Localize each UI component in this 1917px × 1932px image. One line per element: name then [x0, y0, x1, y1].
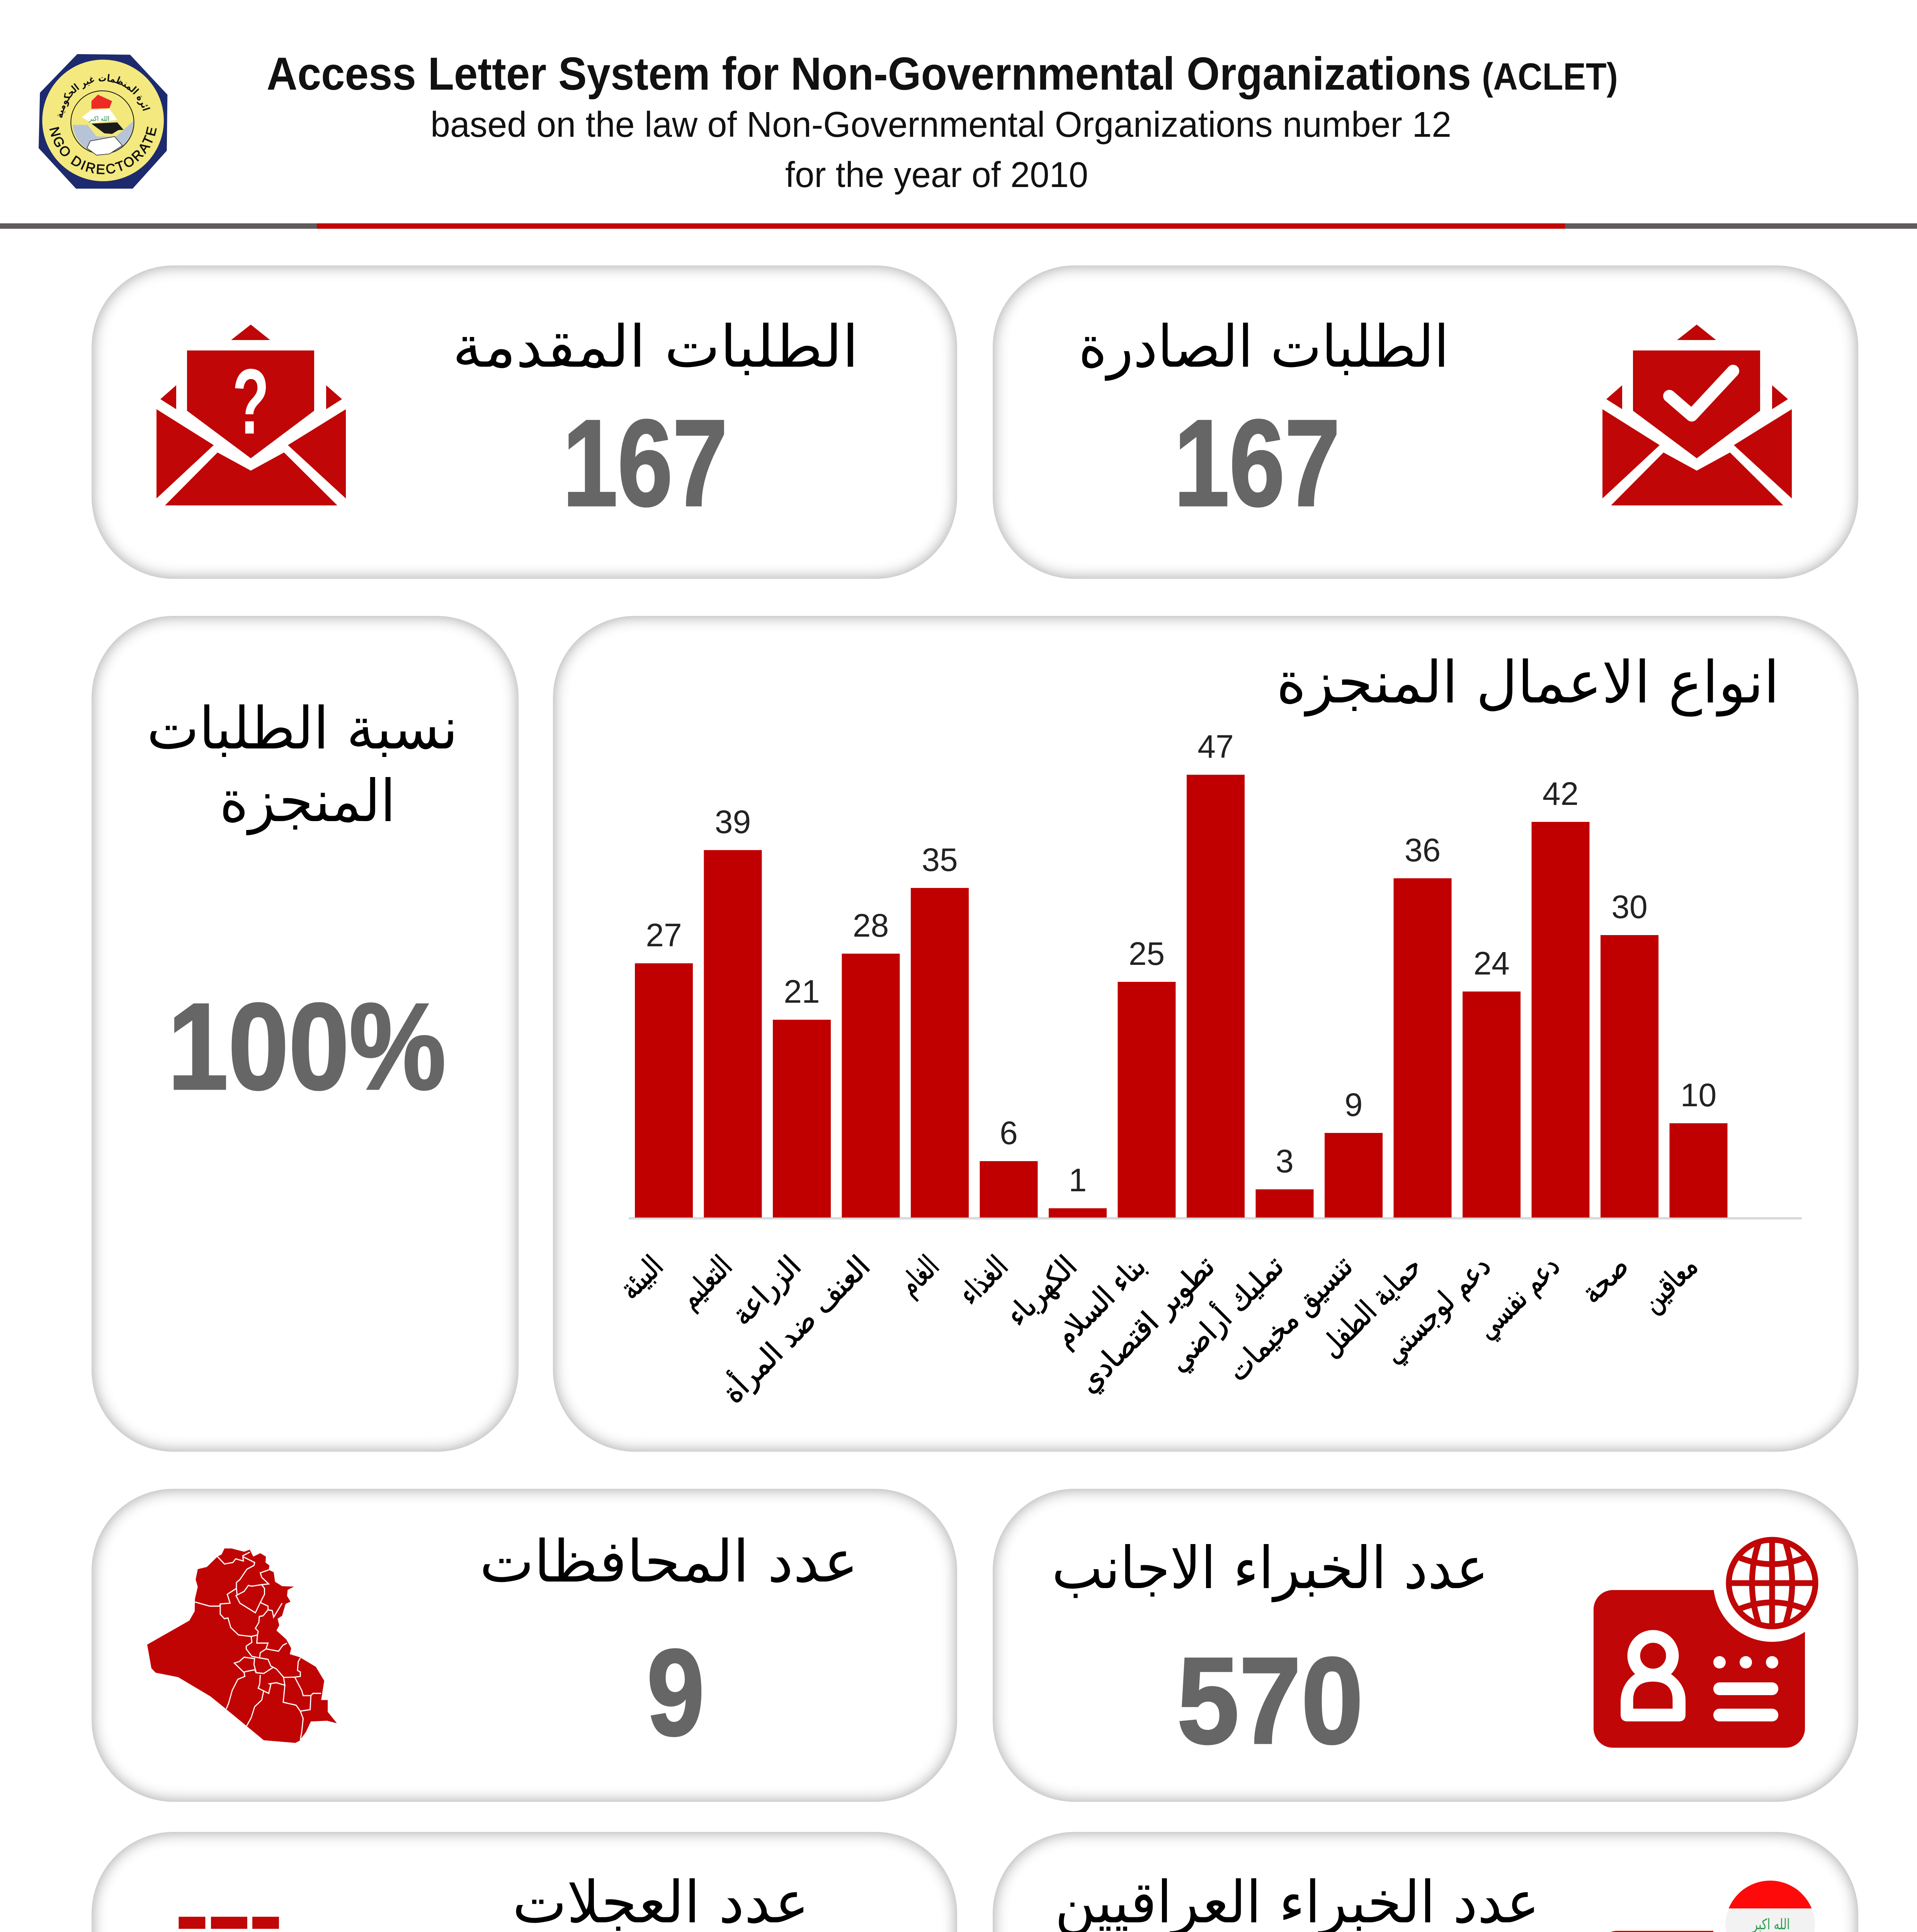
heading: عدد المحافظات [480, 1528, 858, 1595]
logo: NGO Directorate seal: NGO DIRECTORATE [46, 125, 160, 177]
bar chart: الكهرباء [1000, 1249, 1084, 1333]
panel: types of completed work [553, 616, 1859, 1452]
bar chart: 39 [715, 804, 751, 840]
panel: requests submitted [92, 265, 957, 579]
panel: Iraqi experts [993, 1832, 1858, 1932]
icon: map of Iraq [147, 1548, 337, 1743]
heading: انواع الاعمال المنجزة [1276, 649, 1779, 717]
bar chart: الزراعة [725, 1249, 808, 1332]
logo: NGO Directorate seal: الله اكبر [88, 115, 109, 122]
panel: governorates [92, 1489, 957, 1802]
bar chart: تمليك أراضي [1160, 1247, 1291, 1379]
bar chart: بناء السلام [1047, 1249, 1152, 1354]
bar chart: تطوير اقتصادي [1071, 1249, 1221, 1400]
bar chart: حماية الطفل [1313, 1249, 1428, 1364]
bar chart: الغذاء [952, 1249, 1014, 1311]
bar chart: 42 [1543, 776, 1579, 812]
value: 167 [1174, 395, 1340, 532]
bar chart: 25 [1129, 935, 1165, 972]
bar chart: البيئة [612, 1249, 670, 1306]
logo: NGO Directorate seal: دائرة المنظمات غير الحكومية [17, 26, 152, 119]
title block: based on the law of Non-Governmental Organizations number 12 [430, 104, 1451, 145]
bar chart: تنسيق مخيمات [1220, 1249, 1359, 1388]
icon: ID card with globe [1594, 1524, 1831, 1748]
bar chart: 6 [1000, 1115, 1018, 1151]
bar chart: 9 [1345, 1087, 1362, 1123]
icon: ID card with Iraqi flag [1611, 1881, 1815, 1932]
bar chart: التعليم [672, 1249, 738, 1315]
bar chart: 1 [1069, 1162, 1087, 1198]
bar chart: العنف ضد المرأة [714, 1247, 877, 1410]
title block [267, 48, 1618, 195]
bar chart: 10 [1681, 1077, 1716, 1113]
bar chart: معاقين [1634, 1249, 1704, 1319]
bar chart: 24 [1473, 945, 1510, 981]
value: 100% [168, 978, 446, 1115]
panel: foreign experts [993, 1489, 1858, 1802]
bar chart: 28 [853, 907, 889, 944]
bar chart: 21 [784, 973, 820, 1010]
bar chart: 36 [1405, 832, 1441, 868]
heading [147, 695, 458, 835]
bar chart: دعم نفسي [1469, 1249, 1567, 1346]
panel: completion rate [92, 616, 519, 1452]
value: 167 [563, 395, 728, 532]
bar chart [612, 728, 1802, 1410]
logo: NGO Directorate seal [17, 26, 167, 189]
heading: الطلبات المقدمة [452, 313, 859, 381]
bar chart: 35 [922, 842, 958, 878]
bar chart: 27 [646, 917, 682, 953]
heading: المنجزة [219, 768, 396, 835]
bar chart: 3 [1276, 1143, 1294, 1179]
panel: vehicles [92, 1832, 957, 1932]
icon: envelope with question mark [156, 325, 346, 505]
heading: عدد الخبراء الاجانب [1052, 1535, 1488, 1602]
bar chart: 47 [1197, 728, 1234, 765]
bar chart: صحة [1574, 1249, 1635, 1310]
bar chart: الغام [891, 1249, 946, 1303]
title block: Access Letter System for Non-Governmental Organizations [267, 48, 1471, 100]
icon: envelope with check mark [1602, 325, 1792, 505]
header divider [0, 223, 1917, 229]
heading: نسبة الطلبات [147, 695, 458, 762]
heading: الطلبات الصادرة [1078, 313, 1449, 381]
icon: envelope with question mark: ? [232, 350, 269, 453]
bar chart: 30 [1611, 889, 1648, 925]
title block: (ACLET) [1482, 55, 1618, 98]
value: 9 [647, 1624, 704, 1761]
panel: requests issued [993, 265, 1858, 579]
bar chart: دعم لوجستي [1376, 1249, 1497, 1370]
title block: for the year of 2010 [785, 155, 1088, 195]
value: 570 [1177, 1632, 1363, 1769]
icon: vehicle [138, 1917, 386, 1932]
